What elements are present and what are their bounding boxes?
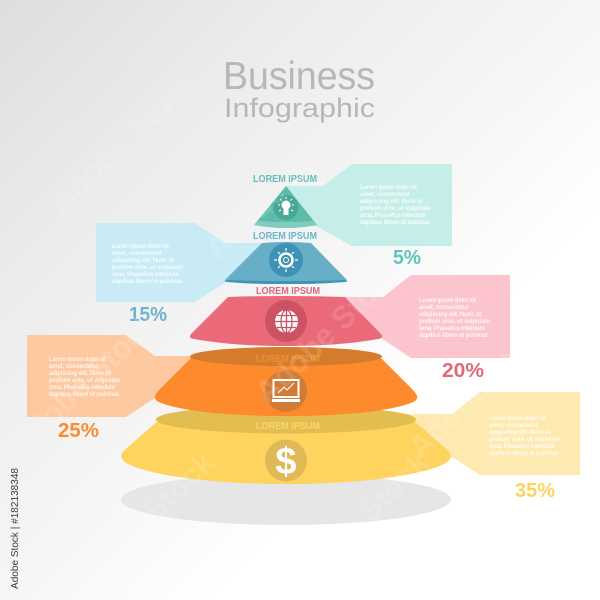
callout: 25%: urna. Phasellus interdum bbox=[49, 385, 115, 391]
callout: 35%: urna. Phasellus interdum bbox=[489, 444, 555, 450]
tier 2: blue bbox=[225, 231, 347, 284]
callout: 20%: adipiscing elit. Nunc id bbox=[419, 312, 481, 318]
stock watermarks: Adobe Stock bbox=[275, 444, 437, 600]
callout: 5%: dapibus libero id pulvinar. bbox=[360, 220, 431, 226]
value: 15%: 15% bbox=[129, 303, 167, 326]
title: Infographic bbox=[224, 93, 375, 123]
callout: 5%: urna. Phasellus interdum bbox=[360, 213, 426, 219]
icon: globe bbox=[275, 310, 298, 333]
stock watermarks: Adobe Stock bbox=[3, 304, 165, 462]
callout: 20%: dapibus libero id pulvinar. bbox=[419, 333, 489, 339]
tier 3: red: LOREM IPSUM bbox=[256, 286, 320, 297]
value: 20%: 20% bbox=[442, 359, 484, 382]
callout: 35%: Lorem ipsum dolor sit bbox=[489, 416, 546, 422]
callout: 25%: pretium ante, ut vulputate bbox=[49, 378, 121, 384]
callout: 35%: adipiscing elit. Nunc id bbox=[489, 430, 551, 436]
callout: 25%: Lorem ipsum dolor sit bbox=[49, 357, 106, 363]
callout: 20%: pretium ante, ut vulputate bbox=[419, 319, 491, 325]
ground shadow bbox=[121, 474, 451, 525]
callout: 5%: Lorem ipsum dolor sit bbox=[360, 185, 417, 191]
stock watermarks: Adobe Stock bbox=[198, 109, 360, 267]
callout: 25%: adipiscing elit. Nunc id bbox=[49, 371, 111, 377]
stock id label: Adobe Stock | #182138348 bbox=[10, 468, 21, 589]
icon: target bbox=[274, 248, 298, 272]
tier 5: yellow bbox=[121, 406, 451, 484]
icon: laptop chart bbox=[272, 380, 300, 400]
value: 5%: 5% bbox=[393, 246, 421, 269]
tier 5: yellow: LOREM IPSUM bbox=[256, 421, 320, 432]
value: 25%: 25% bbox=[58, 419, 99, 442]
stock watermarks: Adobe Stock bbox=[60, 444, 222, 600]
callout: 35%: dapibus libero id pulvinar. bbox=[489, 451, 559, 457]
title bbox=[223, 55, 375, 123]
tier 1: teal: LOREM IPSUM bbox=[253, 174, 317, 185]
callout: 35%: amet, consectetur bbox=[489, 423, 540, 429]
callout: 15%: adipiscing elit. Nunc id bbox=[112, 258, 174, 264]
callout: 25%: amet, consectetur bbox=[49, 364, 100, 370]
callout: 5% bbox=[286, 164, 452, 246]
callout: 15%: urna. Phasellus interdum bbox=[112, 272, 179, 278]
callout: 35%: pretium ante, ut vulputate bbox=[489, 437, 561, 443]
callout: 15%: Lorem ipsum dolor sit bbox=[112, 244, 169, 250]
callout: 15%: dapibus libero id pulvinar. bbox=[112, 279, 183, 285]
tier 1: teal bbox=[253, 174, 317, 228]
callout: 25%: dapibus libero id pulvinar. bbox=[49, 392, 120, 398]
callout: 5%: amet, consectetur bbox=[360, 192, 411, 198]
callout: 5%: pretium ante, ut vulputate bbox=[360, 206, 432, 212]
stock watermarks: Adobe Stock bbox=[43, 62, 205, 220]
icon: light bulb bbox=[278, 197, 294, 215]
callout: 20% bbox=[286, 275, 510, 358]
tier 4: orange: LOREM IPSUM bbox=[256, 354, 320, 365]
callout: 20%: urna. Phasellus interdum bbox=[419, 326, 485, 332]
value: 35%: 35% bbox=[515, 479, 555, 502]
callout: 15%: pretium ante, ut vulputate bbox=[112, 265, 184, 271]
callout: 15% bbox=[96, 223, 286, 302]
callout: 5%: adipiscing elit. Nunc id bbox=[360, 199, 423, 205]
callout: 35% bbox=[286, 392, 580, 475]
tier 4: orange bbox=[155, 347, 417, 416]
stock watermarks: Adobe Stock bbox=[401, 307, 563, 465]
stock watermarks: Adobe Stock bbox=[248, 252, 410, 410]
icon: dollar: $ bbox=[275, 441, 297, 483]
callout: 15%: amet, consectetur bbox=[112, 251, 163, 257]
tier 3: red bbox=[190, 286, 382, 346]
callout: 20%: amet, consectetur bbox=[419, 305, 470, 311]
title: Business bbox=[223, 55, 375, 98]
callout: 25% bbox=[27, 335, 286, 417]
tier 2: blue: LOREM IPSUM bbox=[253, 231, 317, 242]
callout: 20%: Lorem ipsum dolor sit bbox=[419, 298, 476, 304]
